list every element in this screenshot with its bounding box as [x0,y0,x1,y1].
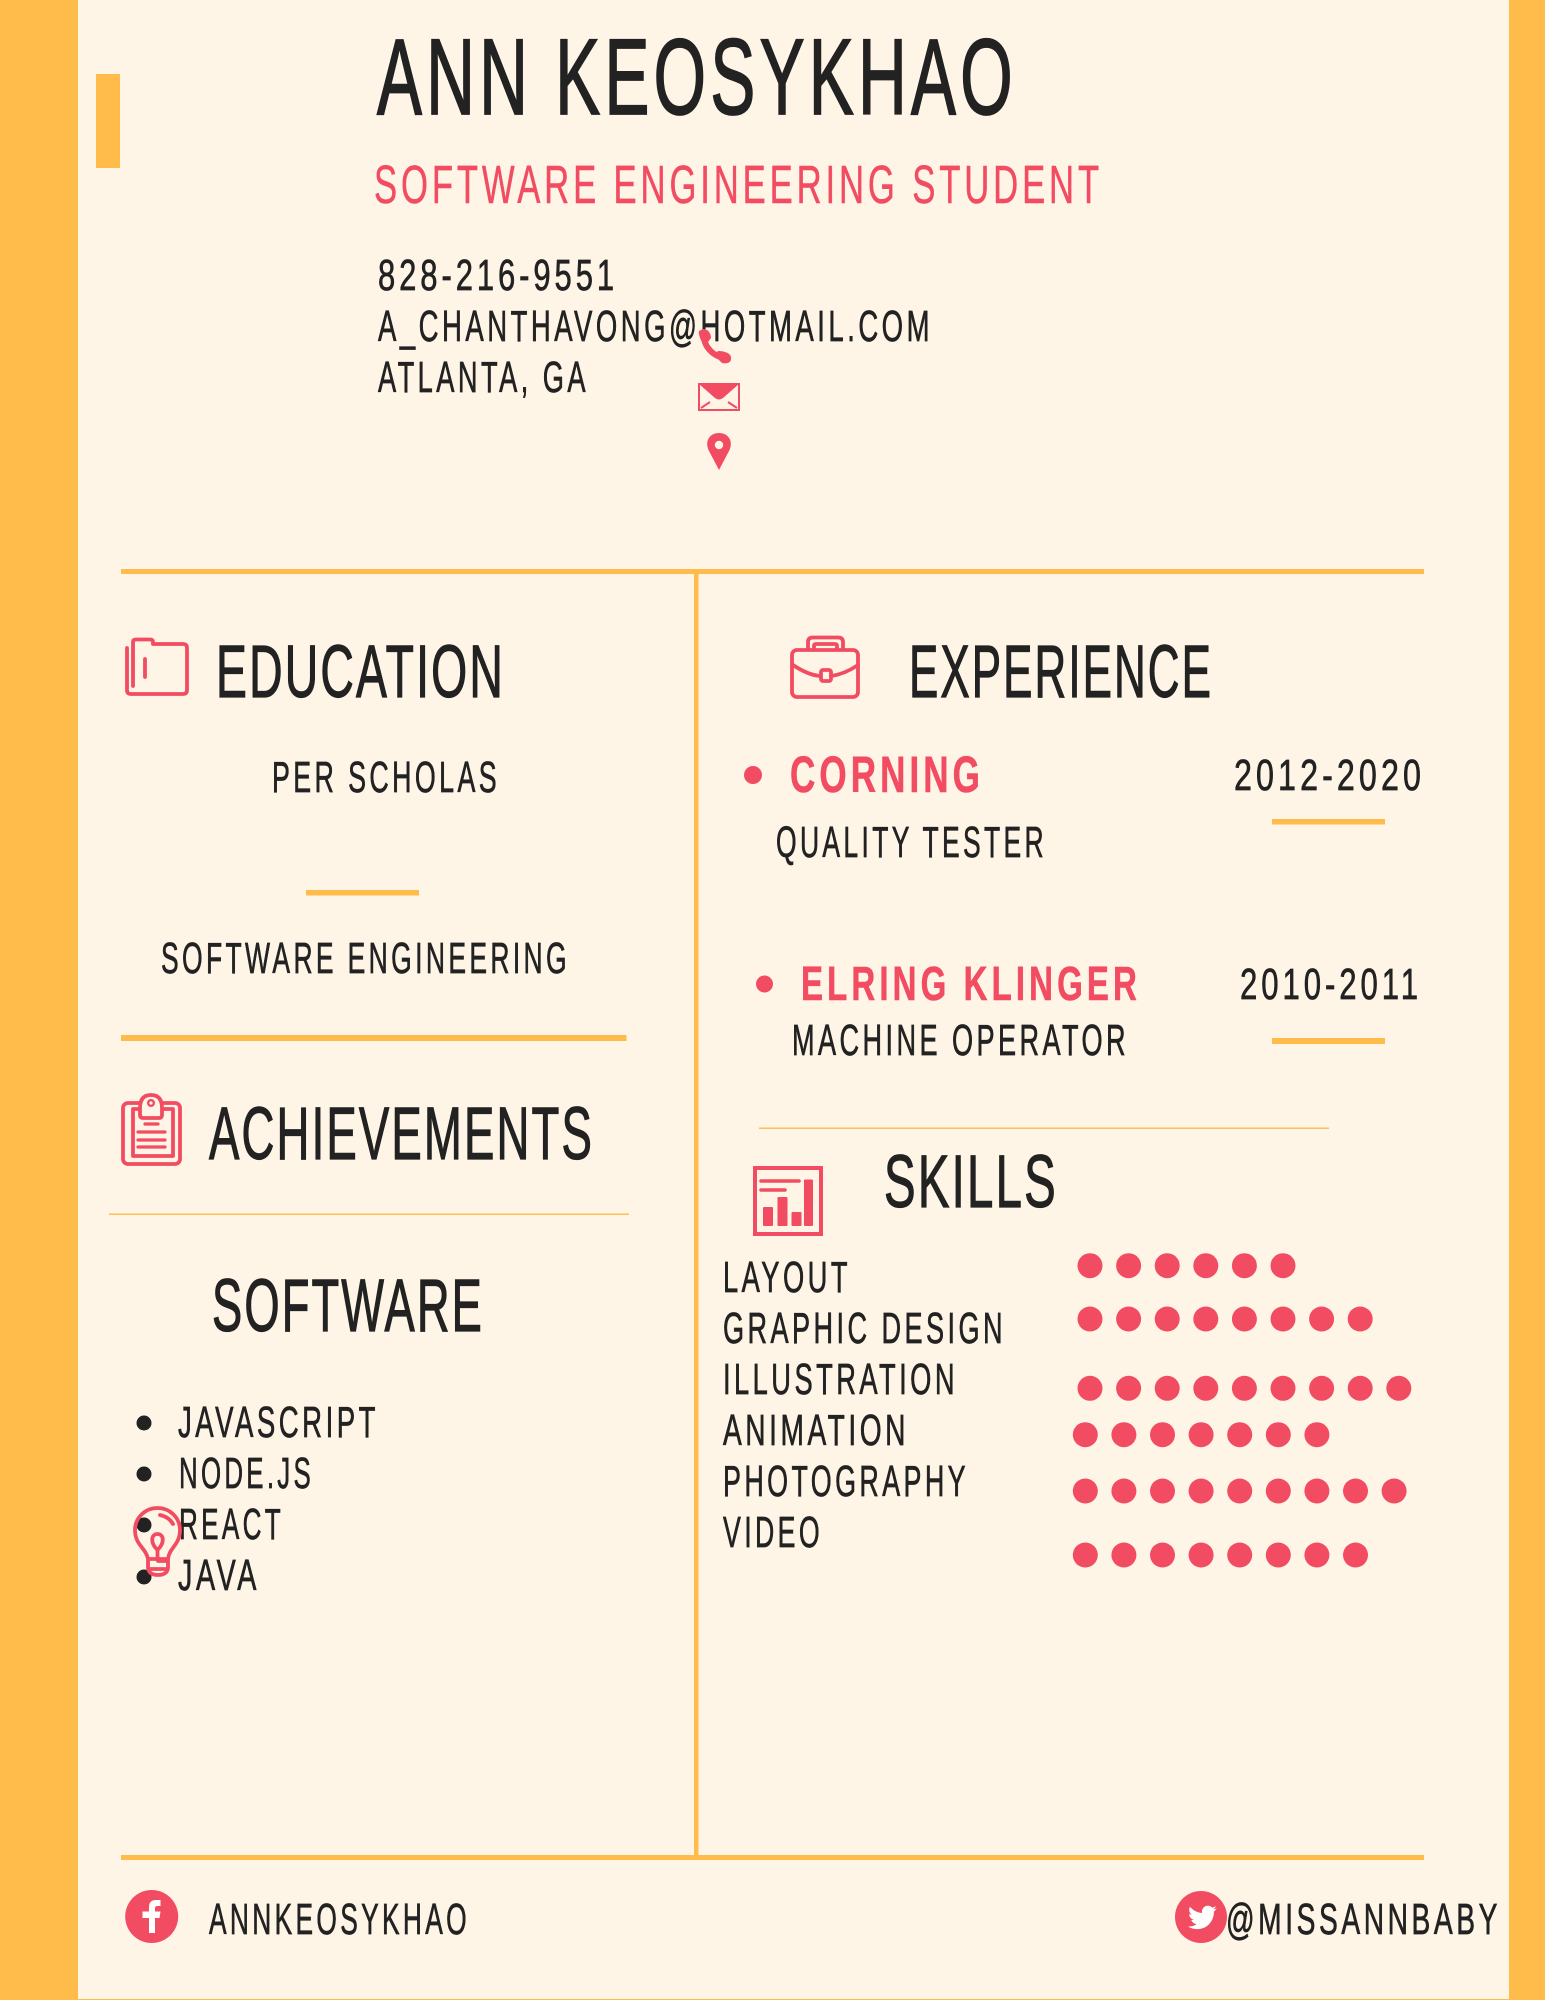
title: name: ANN KEOSYKHAO [377,16,1017,137]
panel: achievements [109,1092,629,1215]
icon: folder [127,640,187,694]
job: elring klinger: ELRING KLINGER [801,958,1141,1011]
panel: skills [723,1140,1411,1568]
bullet list item: node [136,1450,314,1498]
accent bar [96,74,120,168]
heading: education: EDUCATION [216,630,505,713]
skill labels: GRAPHIC DESIGN [723,1305,1006,1353]
panel: software [135,1264,484,1600]
skill rating dots [1073,1253,1411,1568]
subtitle: role: SOFTWARE ENGINEERING STUDENT [374,155,1103,215]
bullet list item: java [136,1552,260,1600]
icon: briefcase [792,638,858,697]
footer: social links [125,1890,1501,1944]
bullet list item: javascript [136,1399,379,1447]
contact: email: A_CHANTHAVONG@HOTMAIL.COM [378,303,933,351]
job: elring klinger [756,958,1422,1065]
skill labels: VIDEO [723,1509,823,1557]
bullet list item: java: JAVA [178,1552,260,1600]
skill labels: LAYOUT [723,1254,851,1302]
icon: location pin [707,433,731,470]
heading: experience: EXPERIENCE [909,630,1213,713]
heading: achievements: ACHIEVEMENTS [209,1092,594,1175]
skill labels: ANIMATION [723,1407,909,1455]
software list [136,1399,379,1600]
contact: location: ATLANTA, GA [378,354,589,402]
contact: phone: 828-216-9551 [378,252,618,300]
heading: skills: SKILLS [884,1140,1058,1223]
icon: facebook [125,1890,178,1943]
job title: quality tester: QUALITY TESTER [776,819,1047,867]
bullet list item: react [136,1501,284,1549]
header [374,16,1103,470]
icon: bar chart [755,1168,821,1234]
icon: twitter [1175,1891,1227,1943]
icon: envelope [698,383,740,411]
bullet list item: node: NODE.JS [179,1450,314,1498]
icon: clipboard [123,1095,180,1164]
job dates: elring klinger: 2010-2011 [1240,961,1422,1009]
heading: software: SOFTWARE [212,1264,484,1347]
job: corning: CORNING [790,746,984,803]
bullet list item: javascript: JAVASCRIPT [178,1399,379,1447]
job: corning [744,746,1425,867]
panel: experience [744,630,1425,1129]
job title: machine operator: MACHINE OPERATOR [792,1017,1129,1065]
handle: facebook: ANNKEOSYKHAO [209,1896,470,1944]
field of study: SOFTWARE ENGINEERING [161,935,570,983]
panel: education [121,630,626,1041]
bullet list item: react: REACT [179,1501,284,1549]
job dates: corning: 2012-2020 [1234,752,1425,800]
skill labels: ILLUSTRATION [723,1356,958,1404]
skill labels: PHOTOGRAPHY [723,1458,969,1506]
skill labels [723,1254,1006,1557]
icon: phone [699,329,731,363]
icon: light bulb [135,1508,180,1575]
school name: PER SCHOLAS [272,754,500,802]
